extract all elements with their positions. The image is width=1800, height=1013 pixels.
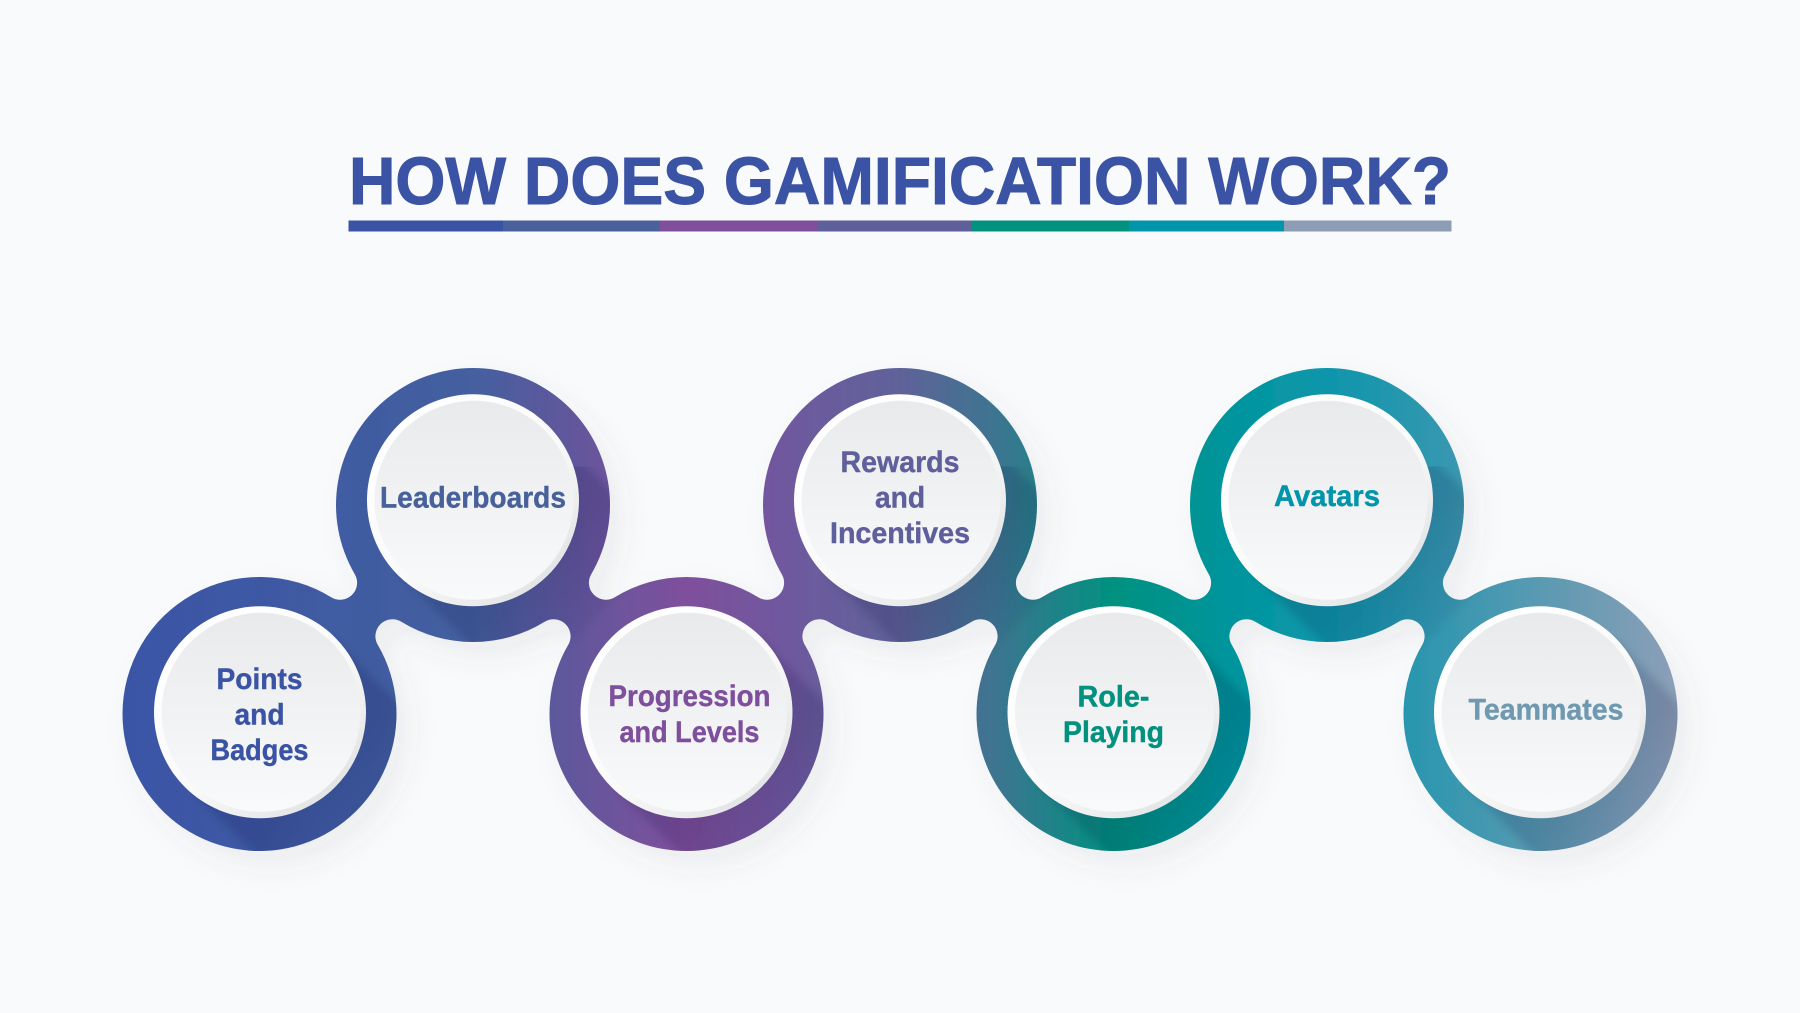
title underline: seven colour segments bbox=[348, 220, 1452, 232]
step 2: Leaderboards bbox=[367, 394, 579, 606]
step 7: Teammates bbox=[1434, 606, 1646, 818]
step 1: Points and Badges: Badges bbox=[210, 734, 308, 767]
step 5: Role-Playing: Playing bbox=[1063, 716, 1164, 749]
step 6: Avatars: Avatars bbox=[1274, 480, 1380, 513]
step 3: Progression and Levels: Progression bbox=[608, 680, 770, 713]
step 1: Points and Badges: Points bbox=[216, 663, 302, 696]
step 1: Points and Badges bbox=[154, 606, 366, 818]
step 7: Teammates: Teammates bbox=[1468, 694, 1624, 726]
title: HOW DOES GAMIFICATION WORK? bbox=[349, 144, 1451, 219]
connected ring chain bbox=[122, 368, 1678, 851]
step 5: Role-Playing: Role- bbox=[1078, 680, 1150, 714]
step 4: Rewards and Incentives: Incentives bbox=[830, 517, 970, 550]
step 3: Progression and Levels: and Levels bbox=[620, 716, 760, 749]
step 3: Progression and Levels bbox=[580, 606, 792, 818]
step 2: Leaderboards: Leaderboards bbox=[380, 482, 566, 514]
step 5: Role-Playing bbox=[1008, 606, 1220, 818]
long shadows on the ring bbox=[260, 500, 1660, 832]
step 4: Rewards and Incentives: and bbox=[875, 482, 925, 514]
step 1: Points and Badges: and bbox=[234, 698, 284, 732]
step 4: Rewards and Incentives bbox=[794, 394, 1006, 606]
step 4: Rewards and Incentives: Rewards bbox=[840, 446, 960, 479]
step 6: Avatars bbox=[1221, 394, 1433, 606]
